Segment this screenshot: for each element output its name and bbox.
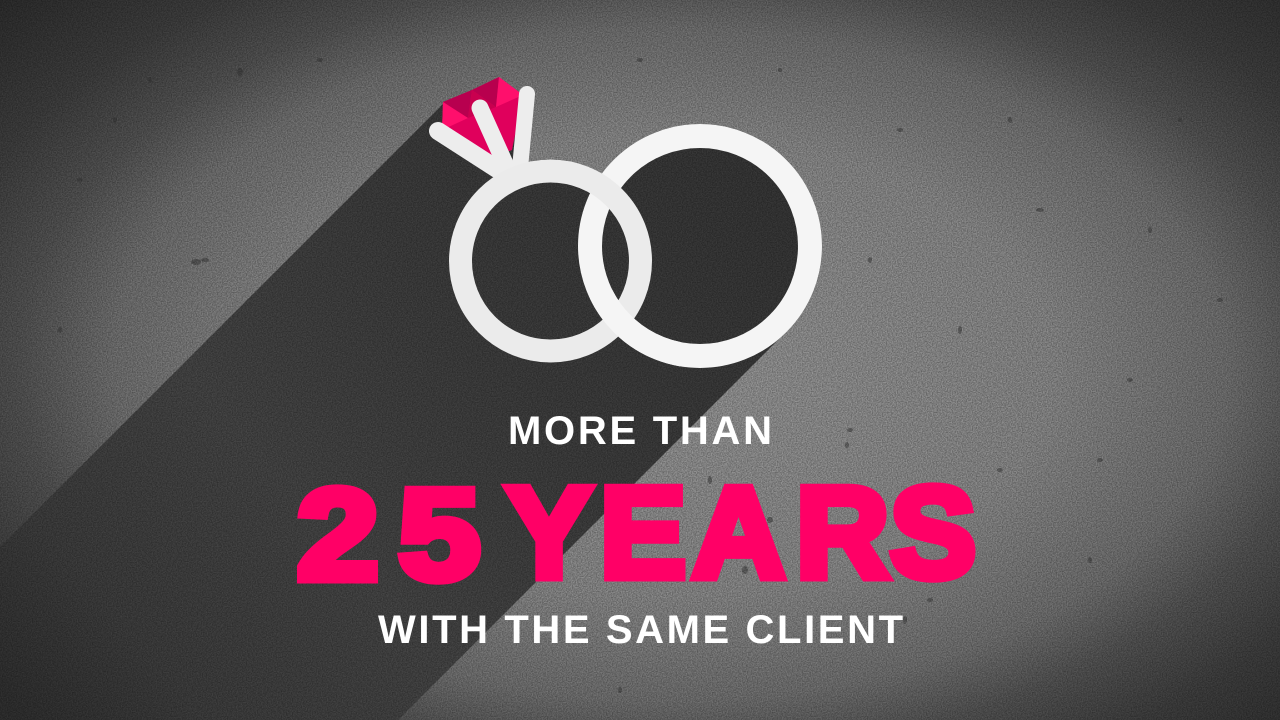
text: more than: MORE THAN	[508, 409, 772, 453]
small ring	[460, 171, 640, 351]
large ring	[590, 136, 810, 356]
long shadow	[0, 78, 822, 720]
headline: 25 years	[297, 461, 976, 607]
large ring overlap at lower crossing	[590, 290, 680, 366]
number: 25: 25	[297, 463, 480, 607]
ring prongs	[438, 94, 527, 169]
icon: engagement ring with ruby	[438, 77, 810, 356]
text: with the same client: WITH THE SAME CLIENT	[378, 608, 903, 652]
word: years: YEARS	[506, 461, 976, 605]
icon: ruby gem	[442, 77, 523, 158]
